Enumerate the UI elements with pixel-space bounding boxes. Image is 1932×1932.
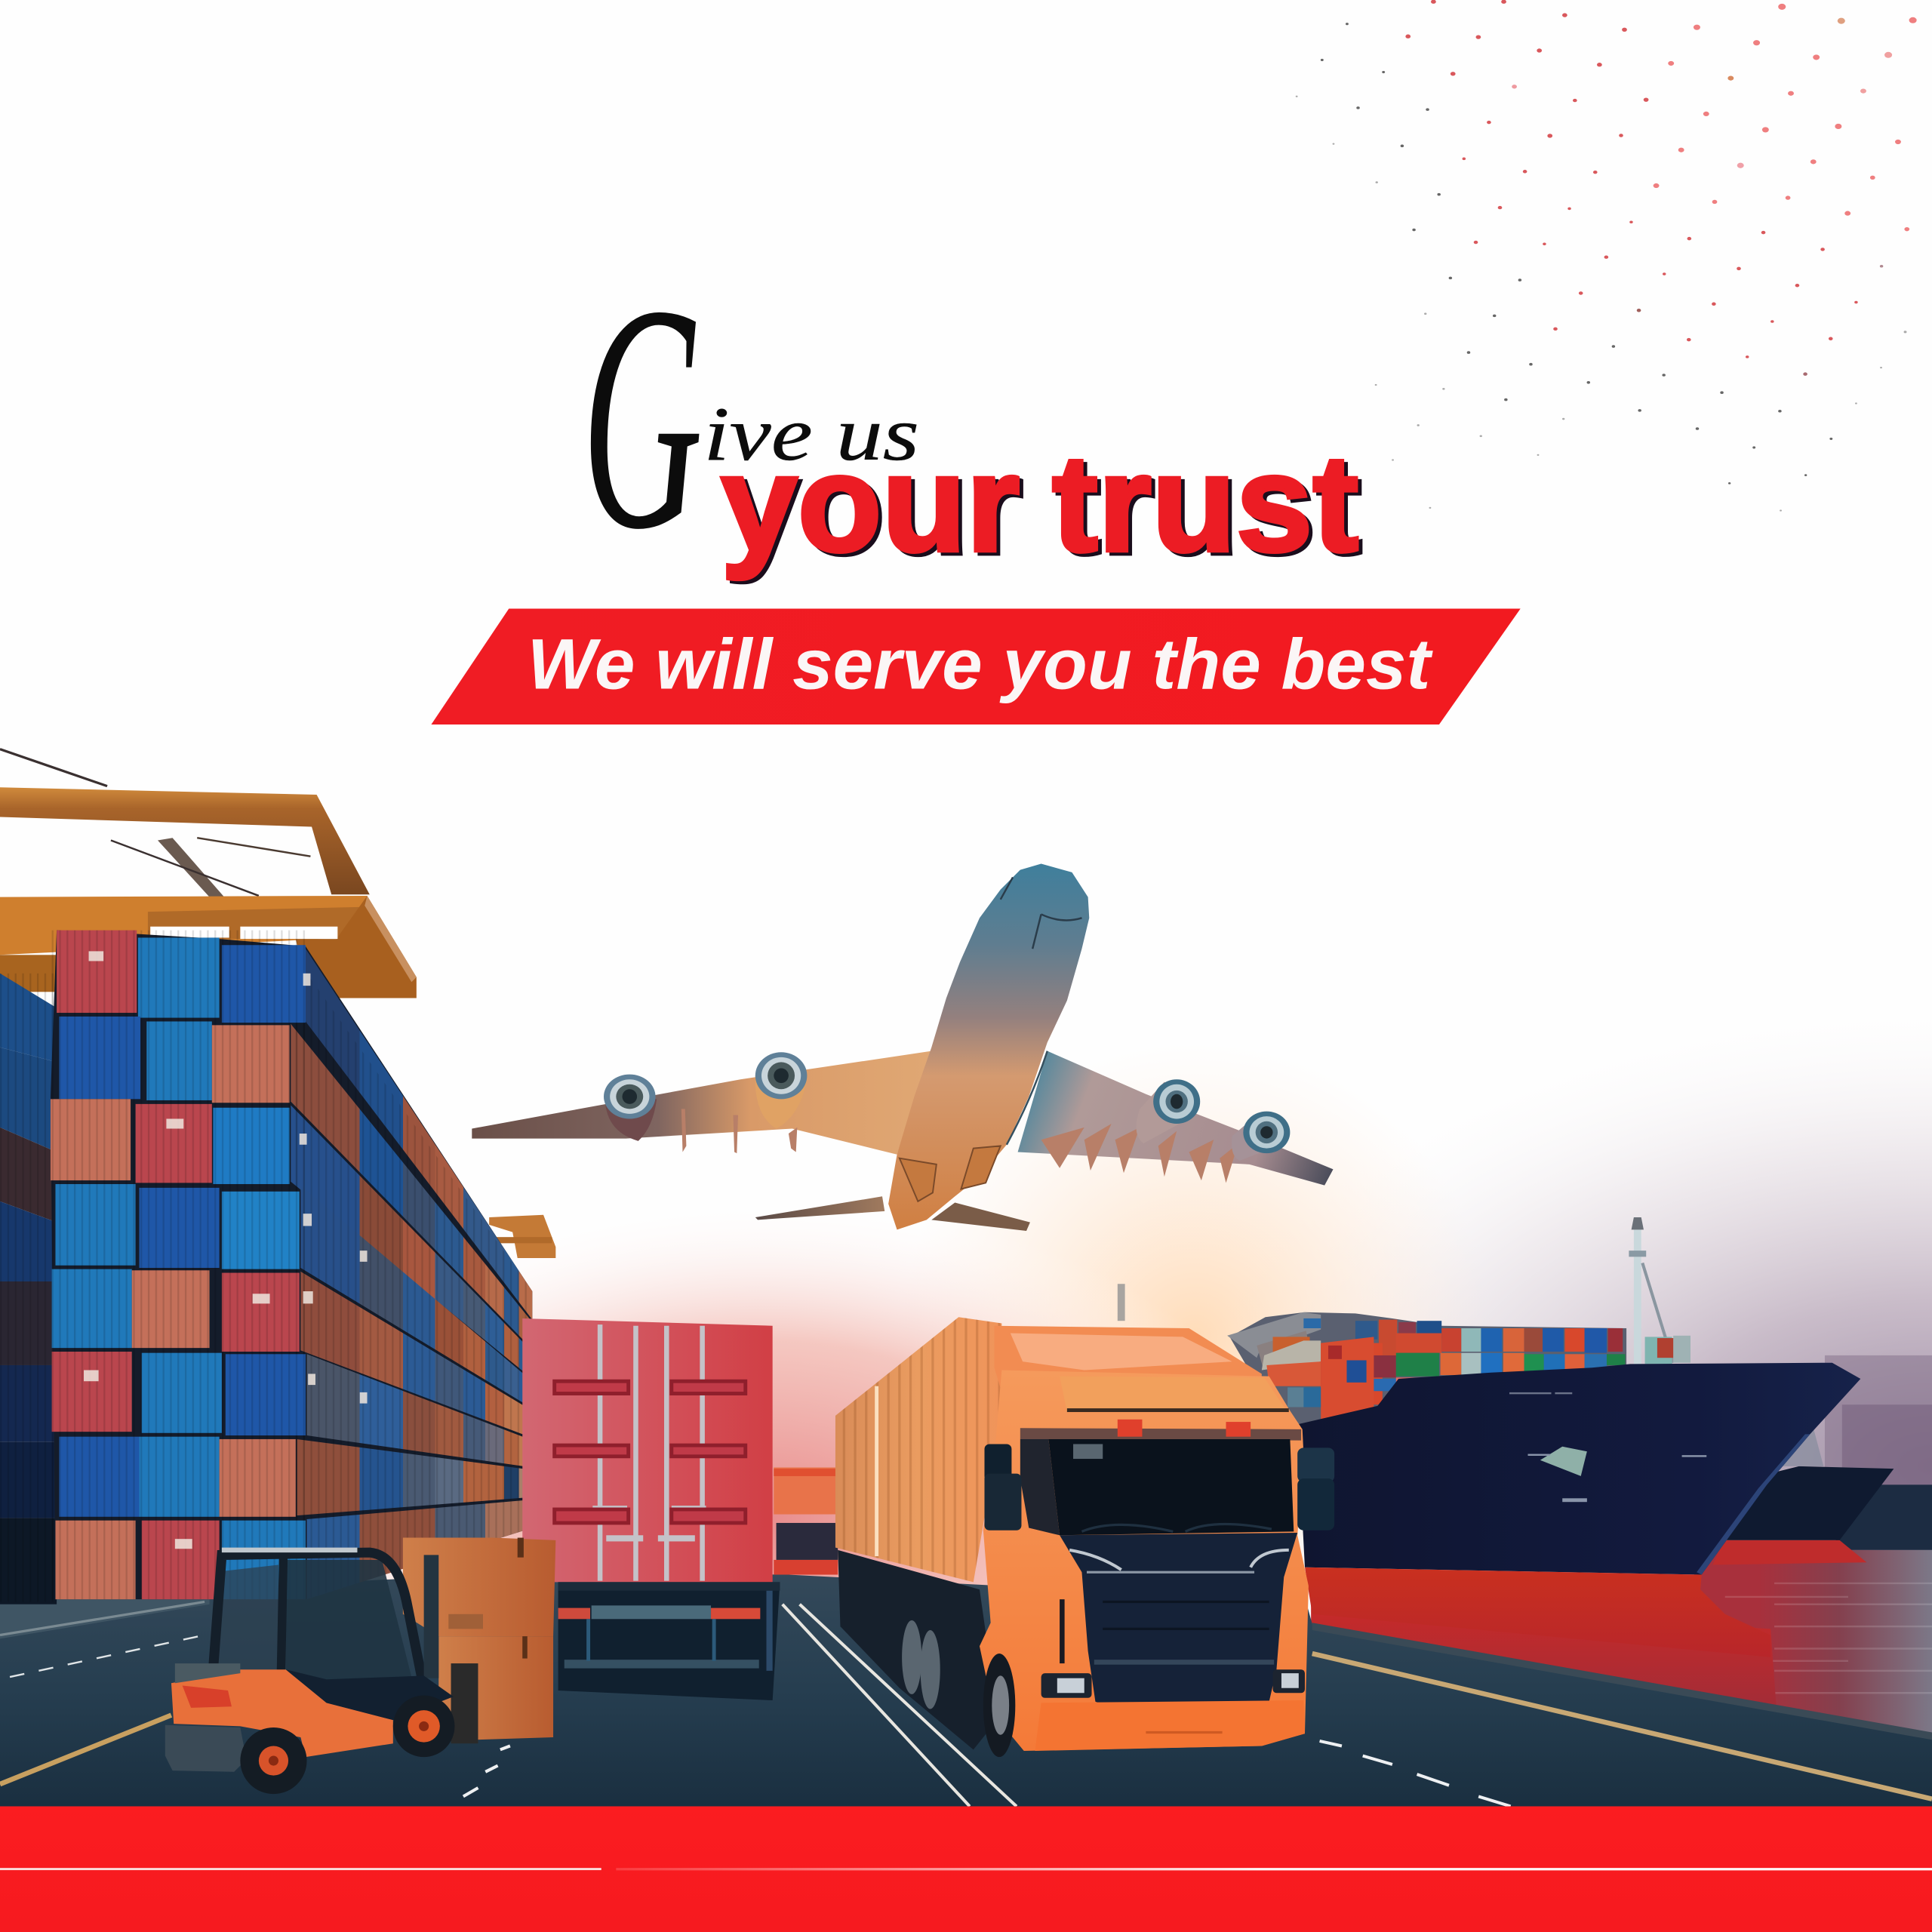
door slots [555, 1381, 746, 1523]
forklift [165, 1548, 478, 1794]
grille [1060, 1533, 1297, 1715]
front wheel [983, 1654, 1015, 1757]
bottom red bar [0, 1806, 1932, 1932]
far left stack [0, 974, 57, 1604]
cab roof fairing [995, 1326, 1262, 1392]
truck chassis [558, 1582, 780, 1700]
dock crane [0, 749, 417, 998]
side window [1020, 1439, 1060, 1535]
tail planes [755, 1196, 884, 1220]
red hull [1305, 1567, 1770, 1657]
side ribs [290, 949, 532, 1599]
hull markings [1509, 1392, 1706, 1502]
mirrors [984, 1444, 1011, 1481]
windshield [1048, 1439, 1294, 1535]
small distant crane [489, 1215, 555, 1258]
antenna [1118, 1284, 1125, 1321]
front ribs [51, 931, 306, 1599]
road [0, 1572, 1932, 1806]
background ships and water [1227, 1217, 1932, 1737]
dot pattern [1296, 0, 1917, 512]
far shore [1836, 1484, 1932, 1550]
cardboard boxes [403, 1538, 555, 1740]
cab body [980, 1371, 1309, 1751]
flap fairings [681, 1109, 1238, 1183]
right wing [1018, 1051, 1334, 1186]
container stack [0, 931, 532, 1604]
trailer [835, 1317, 1001, 1582]
banner text: We will serve you the best [528, 625, 1433, 705]
stack backing [51, 931, 532, 1599]
forklift mast [424, 1555, 438, 1678]
banner [431, 609, 1521, 724]
road markings [0, 1601, 1932, 1806]
second ship [1712, 1429, 1894, 1564]
engines [604, 1052, 1290, 1161]
crane upper frame [0, 787, 370, 894]
heading: your trust: your trust [724, 429, 1362, 583]
left wing [472, 1051, 931, 1155]
ship containers [1227, 1312, 1626, 1429]
water [1694, 1550, 1932, 1737]
roof band [1020, 1428, 1301, 1441]
heading: your trust: your trust [721, 426, 1358, 580]
forklift wheels [240, 1696, 454, 1794]
fuselage [888, 863, 1089, 1229]
container labels [84, 951, 368, 1549]
side containers [291, 949, 532, 1599]
crane lower beam [0, 896, 372, 955]
forklift cab [286, 1560, 413, 1682]
ship hull [1297, 1363, 1860, 1575]
ship mast [1629, 1217, 1690, 1364]
bumper [1035, 1700, 1305, 1751]
forklift body [171, 1669, 393, 1757]
distant truck [774, 1467, 838, 1575]
cargo ship [1227, 1217, 1860, 1712]
heading: Give us: ive us [703, 392, 919, 476]
heading: Give us: G [582, 238, 703, 596]
front containers [51, 931, 306, 1599]
airplane [472, 863, 1334, 1231]
red reflection [1311, 1601, 1777, 1712]
door bars [592, 1324, 706, 1581]
orange truck [835, 1284, 1334, 1757]
truck chassis [838, 1550, 998, 1749]
heading: Give us [582, 238, 919, 596]
landing gear doors [900, 1146, 1001, 1201]
headlights [1041, 1673, 1092, 1698]
red truck rear [522, 1318, 780, 1700]
crane lights [150, 927, 229, 937]
sunset sky [234, 986, 1932, 1626]
